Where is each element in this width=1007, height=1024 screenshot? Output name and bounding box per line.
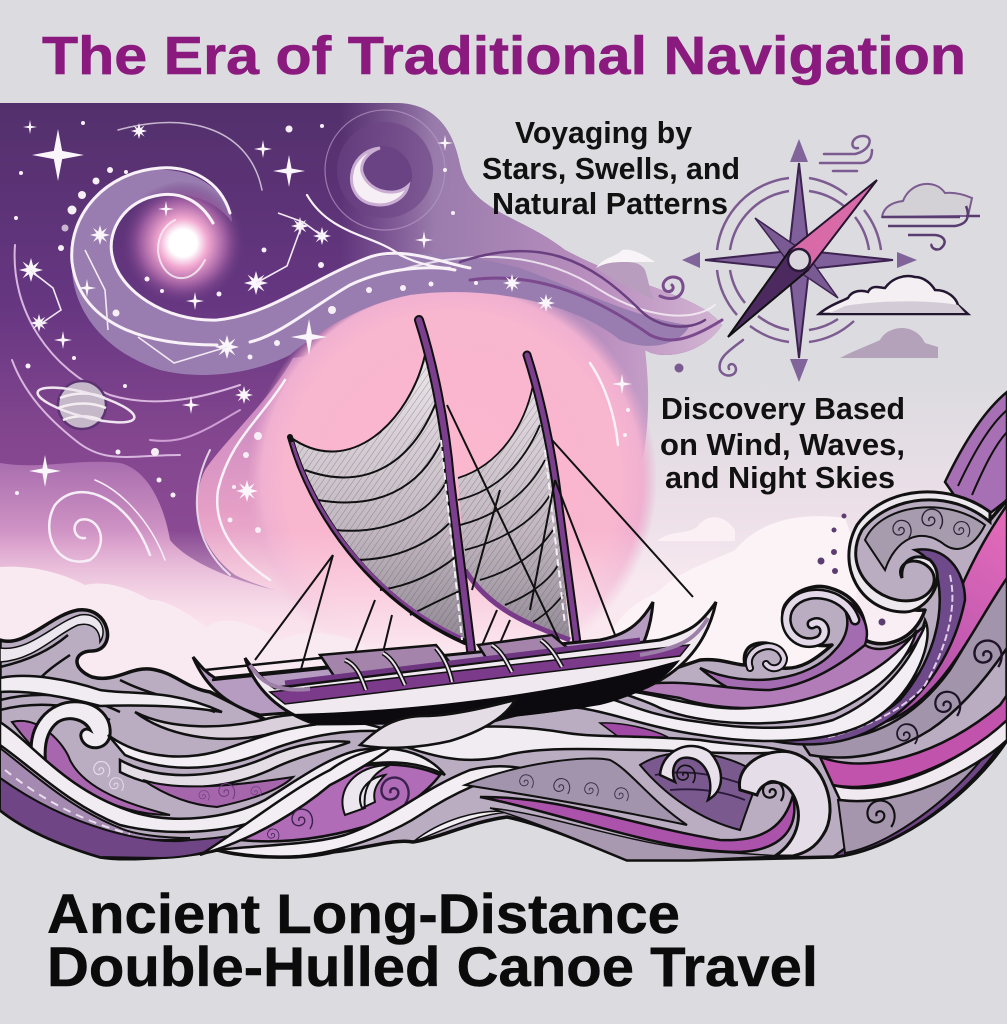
icon: sky curl xyxy=(660,277,683,299)
front boom colour xyxy=(292,442,462,638)
right lower grey spirals xyxy=(867,801,895,827)
center curl spiral xyxy=(677,765,695,783)
text: voyaging xyxy=(482,115,740,221)
sun disc xyxy=(247,275,657,685)
lower cloud shading xyxy=(830,301,965,313)
right lower pink stream xyxy=(820,695,1007,787)
lilac right sky wash xyxy=(340,103,722,545)
stripe lines xyxy=(655,772,745,800)
hull purple stripe xyxy=(270,645,689,704)
right lower white stripe xyxy=(833,720,1007,801)
text: voyaging: Voyaging by xyxy=(515,115,693,150)
deck cross beams light xyxy=(345,640,562,690)
deck platforms xyxy=(320,635,570,685)
right pink cloud xyxy=(657,517,735,541)
front sail cloth xyxy=(290,355,465,642)
text: discovery: Discovery Based xyxy=(661,391,905,426)
icon: compass xyxy=(682,139,917,382)
planet stripes xyxy=(58,394,106,420)
icon: horizon cloud top xyxy=(596,250,655,268)
compass minor points xyxy=(755,218,838,298)
pale squiggles xyxy=(5,770,130,834)
rear rails xyxy=(205,657,330,680)
upper right wave stripes xyxy=(958,410,1007,495)
planet body xyxy=(58,381,106,429)
rear sail ribs xyxy=(458,385,563,622)
left crest stripes xyxy=(0,635,215,720)
icon: wind swirl xyxy=(820,136,872,171)
front boom outer xyxy=(290,437,465,642)
medium wave mauve body xyxy=(700,592,867,698)
middle mauve accent xyxy=(600,723,668,738)
white wedge rising xyxy=(200,745,395,855)
rear sail weave xyxy=(458,385,570,640)
title: The Era of Traditional Navigation xyxy=(42,26,966,86)
moon dark disc xyxy=(352,146,412,206)
sky dots xyxy=(14,121,630,533)
moon halo ring xyxy=(325,110,445,230)
rear hull xyxy=(193,602,653,715)
large curl ring xyxy=(849,492,990,612)
spiral pocket centre xyxy=(381,778,409,804)
right grey band spirals xyxy=(897,641,1002,744)
moon crescent xyxy=(351,148,408,205)
left crest highlight xyxy=(0,615,103,662)
large curl spirals xyxy=(893,509,970,538)
long white band left xyxy=(0,722,445,832)
purple band spirals xyxy=(199,784,261,800)
compass rings xyxy=(717,178,881,342)
purple band under large curl xyxy=(750,549,965,744)
white band upper left xyxy=(0,676,222,712)
bottom pink band xyxy=(480,795,794,852)
galaxy arm band xyxy=(72,169,690,375)
right rising pink band xyxy=(860,505,1007,724)
deck stripe xyxy=(285,640,640,683)
center stripe band xyxy=(640,753,760,830)
rear mast xyxy=(527,355,577,643)
spiral pocket rings xyxy=(342,765,390,815)
foreground wave under hull xyxy=(360,700,515,748)
center spiral details xyxy=(520,775,628,801)
rear mast colour xyxy=(527,355,577,643)
medium curl xyxy=(786,594,855,643)
mauve spiral pocket xyxy=(240,765,440,841)
compass cardinal points xyxy=(705,163,893,358)
icon: upper cloud xyxy=(882,184,972,217)
left clouds xyxy=(0,567,370,720)
panel: night sky and sunset xyxy=(0,103,1007,720)
small curl xyxy=(749,646,784,668)
compass main needle pink half xyxy=(790,180,877,270)
front sail weave xyxy=(290,355,465,642)
pale band c xyxy=(120,741,350,787)
rear sail xyxy=(458,355,577,643)
right white band one xyxy=(613,630,917,723)
heading: bottom caption: Ancient Long-Distance xyxy=(47,882,680,945)
lower-left swirl xyxy=(49,480,165,562)
text: discovery xyxy=(660,391,905,495)
moon halo xyxy=(337,122,433,218)
rear boom xyxy=(465,570,570,640)
rigging lines xyxy=(255,405,693,680)
sun lower fade xyxy=(0,530,720,660)
bottom curl center xyxy=(763,781,783,801)
white band upper middle xyxy=(135,712,380,739)
icon: small wisp curl xyxy=(720,340,743,376)
text: voyaging: Natural Patterns xyxy=(492,186,728,221)
purple band xyxy=(143,777,293,807)
tail white sliver xyxy=(413,811,510,842)
center spiral band xyxy=(465,758,687,825)
constellations xyxy=(30,213,322,363)
wave mass xyxy=(0,495,1007,860)
compass arrows xyxy=(682,139,917,382)
lashing stripes xyxy=(441,440,565,640)
hull shadow xyxy=(290,660,680,724)
text: discovery: and Night Skies xyxy=(665,460,895,495)
dark lower left band xyxy=(0,778,262,858)
large curl grey interior xyxy=(865,507,985,570)
front mast colour xyxy=(419,320,472,658)
white band b xyxy=(108,722,395,768)
heading: bottom caption xyxy=(47,882,818,998)
pocket spirals xyxy=(94,762,123,791)
icon: wisp dot xyxy=(674,364,684,372)
deck cross beams xyxy=(345,640,562,690)
galaxy spiral lines xyxy=(12,122,722,580)
text: discovery: on Wind, Waves, xyxy=(660,427,905,462)
compass hub xyxy=(788,249,810,271)
front sail xyxy=(290,320,565,658)
grey patterned band xyxy=(0,748,190,840)
panel: ocean waves xyxy=(0,392,1007,860)
moon xyxy=(325,110,445,230)
center curl xyxy=(660,746,721,800)
compass main needle dark half xyxy=(728,250,808,337)
bow highlight xyxy=(250,618,708,690)
upper right wave band xyxy=(945,392,1007,525)
icon: double-hulled canoe xyxy=(193,320,716,724)
squiggles on purple band xyxy=(825,575,952,738)
heading: bottom caption: Double-Hulled Canoe Travel xyxy=(47,935,818,998)
icon: grey cloud xyxy=(840,328,938,358)
lower white band xyxy=(217,766,530,857)
text: voyaging: Stars, Swells, and xyxy=(482,151,740,186)
center upper white band xyxy=(400,726,790,760)
right dark edge xyxy=(833,715,1007,857)
bottom grey tail xyxy=(490,808,780,860)
left dusk sky xyxy=(0,440,330,660)
front mast xyxy=(419,320,472,658)
planet ring xyxy=(35,380,137,430)
pink s-curve left of sun xyxy=(197,340,420,612)
mauve wave pocket xyxy=(12,721,170,815)
bottom large white curl xyxy=(739,751,830,856)
icon: lower cloud xyxy=(819,276,968,314)
planet xyxy=(35,380,137,430)
rear sail cloth xyxy=(458,385,570,640)
icon: cloud wind lines xyxy=(882,206,980,249)
right lower grey swirl xyxy=(838,755,985,853)
left curl xyxy=(31,702,110,777)
light lower atmosphere xyxy=(0,380,1007,700)
stars xyxy=(19,120,632,502)
icon: horizon mountain xyxy=(596,262,655,300)
spray dots xyxy=(818,514,886,626)
right grey spiral band xyxy=(800,578,1007,758)
front sail ribs xyxy=(290,355,462,615)
galaxy glow xyxy=(121,181,245,305)
pocket small spirals xyxy=(268,809,312,840)
mauve flow above bands xyxy=(620,625,925,708)
dark sky swirl xyxy=(0,103,722,600)
right white band two xyxy=(470,620,928,741)
right white cloud xyxy=(600,516,860,680)
front hull xyxy=(245,602,716,724)
